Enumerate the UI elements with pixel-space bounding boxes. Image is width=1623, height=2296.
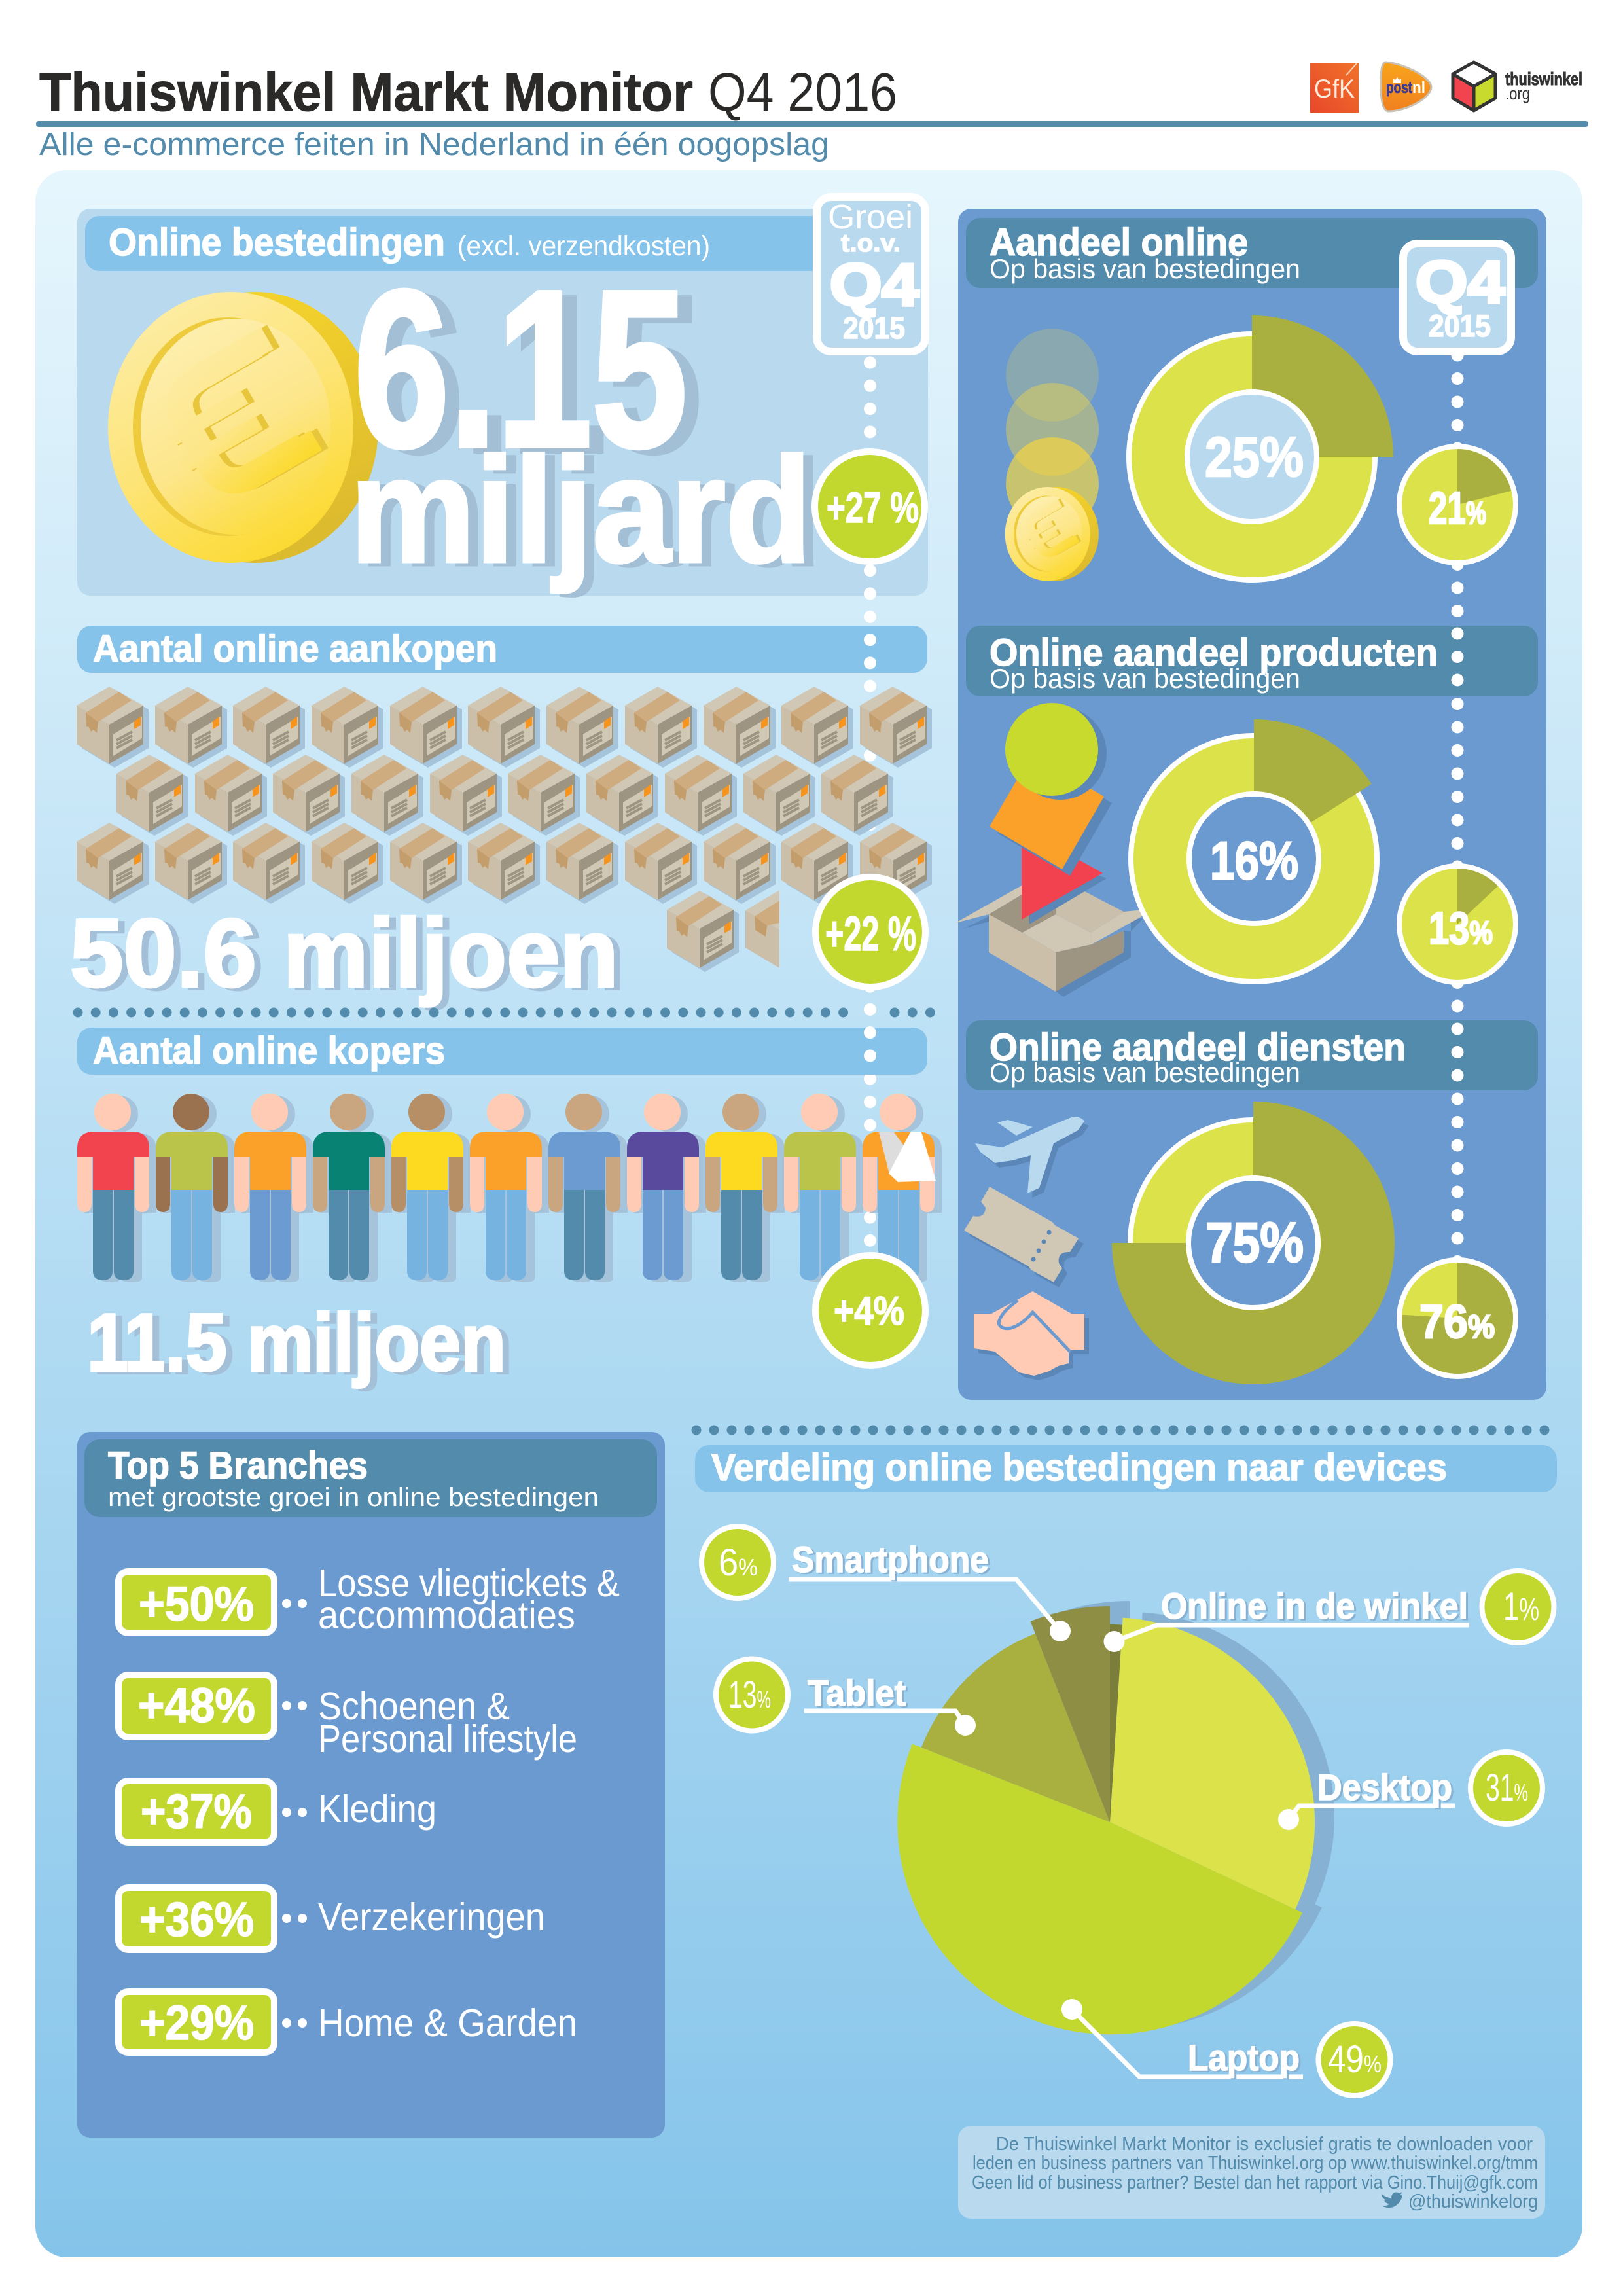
growth dotted line: [864, 363, 876, 1263]
donut: 75%: 75%: [1205, 1211, 1304, 1274]
row: +37%: Kleding: [318, 1787, 437, 1831]
footer info box: leden en business partners van Thuiswinkel.org op www.thuiswinkel.org/tmm: [972, 2153, 1538, 2174]
callout: online in de winkel: Online in de winkel: [1161, 1585, 1468, 1626]
callout: laptop: [1061, 1999, 1390, 2096]
icon: ticket: [964, 1187, 1084, 1287]
icons: people: [77, 1094, 942, 1282]
callout: online in de winkel: 1%: [1503, 1585, 1539, 1628]
title: Q4 2016: [708, 62, 897, 122]
badge: +22%: [815, 877, 925, 987]
row: +48%: [118, 1675, 577, 1761]
icon: twitter bird: [1382, 2192, 1402, 2208]
callout: online in de winkel: [1103, 1571, 1554, 1652]
heading: top 5 branches: Top 5 Branches: [108, 1444, 368, 1487]
logo: thuiswinkel.org: .org: [1505, 84, 1530, 103]
panel: aandeel online: [955, 209, 1546, 1400]
logo: PostNL: post: [1386, 79, 1413, 97]
logo: thuiswinkel.org: [1453, 62, 1582, 111]
badge: groei t.o.v. Q4 2015: 2015: [843, 311, 905, 345]
heading: online aandeel diensten: [966, 1020, 1538, 1090]
dotted line: right column: [1452, 355, 1463, 1263]
callout: smartphone: Smartphone: [792, 1539, 989, 1580]
footer info box: [958, 2126, 1545, 2219]
heading: online bestedingen: Online bestedingen: [109, 221, 445, 264]
icon: plane: [975, 1117, 1089, 1198]
row: +29%: [118, 1992, 577, 2053]
row: +36%: Verzekeringen: [318, 1895, 545, 1939]
badge: groei t.o.v. Q4 2015: t.o.v.: [841, 230, 901, 257]
badge: +22%: +22 %: [825, 906, 916, 961]
footer info box: De Thuiswinkel Markt Monitor is exclusief gratis te downloaden voor: [996, 2134, 1533, 2155]
row: +50%: accommodaties: [318, 1594, 575, 1637]
heading: online aandeel diensten: Online aandeel diensten: [990, 1026, 1406, 1069]
big number: 11.5 miljoen: 11.5 miljoen: [87, 1298, 506, 1388]
badge: groei t.o.v. Q4 2015: Q4: [830, 253, 919, 318]
logo: GfK: [1310, 63, 1359, 113]
badge: Q4 2015: Q4: [1416, 250, 1505, 315]
logo: PostNL: [1381, 62, 1431, 111]
row: +50%: +50%: [139, 1577, 254, 1631]
big number: 6.15: 6.15: [354, 245, 687, 493]
title: Thuiswinkel Markt Monitor: [39, 62, 693, 122]
callout: tablet: 13%: [728, 1674, 771, 1716]
callout: desktop: 31%: [1486, 1767, 1528, 1809]
callout: desktop: [1278, 1752, 1543, 1830]
heading: online aandeel diensten: Op basis van bestedingen: [990, 1057, 1300, 1088]
subtitle: Alle e-commerce feiten in Nederland in één oogopslag: [39, 127, 829, 162]
badge: +4%: [815, 1255, 925, 1365]
logo: GfK: GfK: [1314, 75, 1355, 103]
panel: top 5 branches: [77, 1432, 665, 2138]
heading: online bestedingen: [109, 221, 710, 264]
icon: handshake: [974, 1291, 1089, 1380]
divider dots: [78, 1008, 933, 1017]
icon: open box with shapes: [955, 703, 1143, 997]
small donut: 76%: 76%: [1419, 1296, 1495, 1348]
donut: 75%: [1112, 1102, 1395, 1384]
small donut: 21%: [1399, 446, 1516, 563]
badge: Q4 2015: [1403, 243, 1511, 351]
donut: 25%: 25%: [1205, 426, 1304, 489]
badge: +27%: +27 %: [827, 483, 919, 531]
row: +29%: Home & Garden: [318, 2001, 577, 2045]
callout: tablet: Tablet: [808, 1672, 906, 1713]
heading: aantal online kopers: [77, 1028, 927, 1075]
callout: desktop: Desktop: [1317, 1767, 1452, 1808]
row: +37%: +37%: [141, 1784, 252, 1839]
row: +36%: +36%: [139, 1892, 254, 1946]
row: +48%: Personal lifestyle: [318, 1717, 577, 1761]
icon: euro coin: [108, 292, 378, 563]
icons: parcels: [77, 687, 932, 972]
heading: verdeling naar devices: Verdeling online bestedingen naar devices: [711, 1446, 1447, 1489]
heading: online aandeel producten: [966, 626, 1538, 696]
big number: 50.6 miljoen: 50.6 miljoen: [70, 899, 618, 1007]
big word: miljard: miljard: [350, 427, 812, 594]
callout: tablet: [716, 1659, 976, 1736]
heading: aandeel online: Op basis van bestedingen: [990, 253, 1300, 284]
heading: aandeel online: Aandeel online: [990, 221, 1248, 264]
panel: online bestedingen: [77, 209, 928, 596]
heading: online aandeel producten: Op basis van bestedingen: [990, 663, 1300, 694]
heading: aantal online kopers: Aantal online kopers: [93, 1030, 445, 1072]
badge: groei t.o.v. Q4 2015: [817, 197, 925, 351]
logo: thuiswinkel.org: thuiswinkel: [1505, 69, 1582, 89]
small donut: 13%: [1399, 866, 1516, 982]
icon: falling coin: [1005, 329, 1099, 581]
pie chart: devices: [897, 1601, 1334, 2034]
donut: 16%: [1131, 719, 1377, 982]
row: +37%: [118, 1781, 437, 1842]
small donut: 76%: [1399, 1260, 1516, 1376]
footer info box: Geen lid of business partner? Bestel dan het rapport via Gino.Thuij@gfk.com: [972, 2172, 1538, 2193]
row: +29%: +29%: [139, 1996, 254, 2050]
heading: aantal online aankopen: [77, 626, 927, 673]
logo: PostNL: nl: [1412, 79, 1425, 97]
row: +48%: +48%: [138, 1678, 255, 1732]
row: +50%: [118, 1562, 620, 1637]
small donut: 21%: 21%: [1429, 482, 1486, 533]
badge: +27%: [815, 452, 925, 562]
footer info box: @thuiswinkelorg: [1408, 2191, 1538, 2212]
callout: laptop: Laptop: [1188, 2037, 1300, 2078]
badge: +4%: +4%: [834, 1289, 904, 1334]
heading: online aandeel producten: Online aandeel producten: [990, 632, 1438, 674]
row: +36%: [118, 1888, 545, 1950]
badge: groei t.o.v. Q4 2015: Groei: [828, 198, 913, 236]
small donut: 13%: 13%: [1429, 903, 1493, 954]
donut: 16%: 16%: [1210, 831, 1298, 891]
row: +50%: Losse vliegtickets &: [318, 1562, 620, 1605]
heading: online bestedingen: (excl. verzendkosten): [457, 230, 710, 262]
callout: smartphone: [702, 1526, 1071, 1641]
heading: top 5 branches: met grootste groei in online bestedingen: [108, 1483, 599, 1512]
heading: aantal online aankopen: Aantal online aankopen: [93, 628, 497, 670]
badge: Q4 2015: 2015: [1429, 308, 1491, 343]
heading: top 5 branches: [84, 1439, 657, 1517]
heading: aandeel online: [966, 218, 1538, 288]
callout: laptop: 49%: [1328, 2038, 1382, 2081]
donut: 25%: [1129, 315, 1393, 580]
callout: smartphone: 6%: [719, 1541, 758, 1584]
row: +48%: Schoenen &: [318, 1685, 510, 1728]
